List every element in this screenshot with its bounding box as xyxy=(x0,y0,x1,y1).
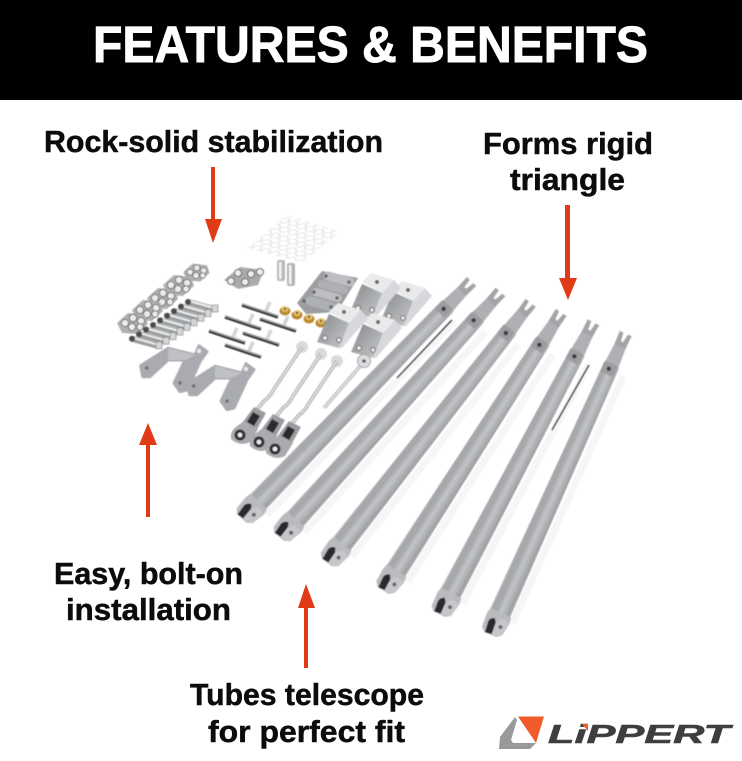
telescoping tube 2 xyxy=(270,284,515,550)
logo wordmark: LiPPERT xyxy=(548,719,734,749)
label: tubes telescope for perfect fit: for perfect fit xyxy=(208,714,405,749)
washers xyxy=(247,215,340,263)
label: easy bolt-on installation: installation xyxy=(66,592,231,627)
label: forms rigid triangle: triangle xyxy=(510,162,625,197)
arrow: down to hardware xyxy=(205,167,222,243)
logo emblem xyxy=(499,716,544,749)
arrow: up to tube end xyxy=(298,584,315,668)
spacer sleeves xyxy=(277,260,295,286)
turnbuckle rods xyxy=(231,341,370,458)
hinge plates xyxy=(297,271,358,314)
telescoping tube 3 xyxy=(318,295,546,574)
label: tubes telescope for perfect fit: Tubes telescope xyxy=(190,677,424,712)
carriage bolts xyxy=(129,299,218,349)
angle brackets xyxy=(317,273,432,358)
hex nut clusters xyxy=(117,264,210,334)
label: easy bolt-on installation xyxy=(54,556,243,627)
label: easy bolt-on installation: Easy, bolt-on xyxy=(54,556,243,591)
label: forms rigid triangle xyxy=(483,126,653,197)
brass bushings xyxy=(280,306,326,328)
logo accent xyxy=(582,724,588,731)
label: forms rigid triangle: Forms rigid xyxy=(483,126,653,161)
arrow: up to brackets xyxy=(139,423,157,517)
telescoping tube 6 xyxy=(479,329,643,642)
header band xyxy=(0,0,742,100)
label: tubes telescope for perfect fit xyxy=(190,677,424,749)
U brackets xyxy=(141,346,254,410)
title: FEATURES & BENEFITS xyxy=(93,16,648,73)
logo: Lippert xyxy=(499,716,734,749)
telescoping tube 5 xyxy=(429,317,610,623)
telescoping tube 4 xyxy=(373,306,577,601)
small hardware pile xyxy=(224,267,264,289)
telescoping tube 1 xyxy=(233,273,485,532)
cross pins xyxy=(209,302,296,357)
label: rock-solid stabilization: Rock-solid stabilization xyxy=(44,124,383,159)
arrow: down to tubes xyxy=(559,205,577,300)
product photo: stabilizer kit xyxy=(117,215,643,642)
